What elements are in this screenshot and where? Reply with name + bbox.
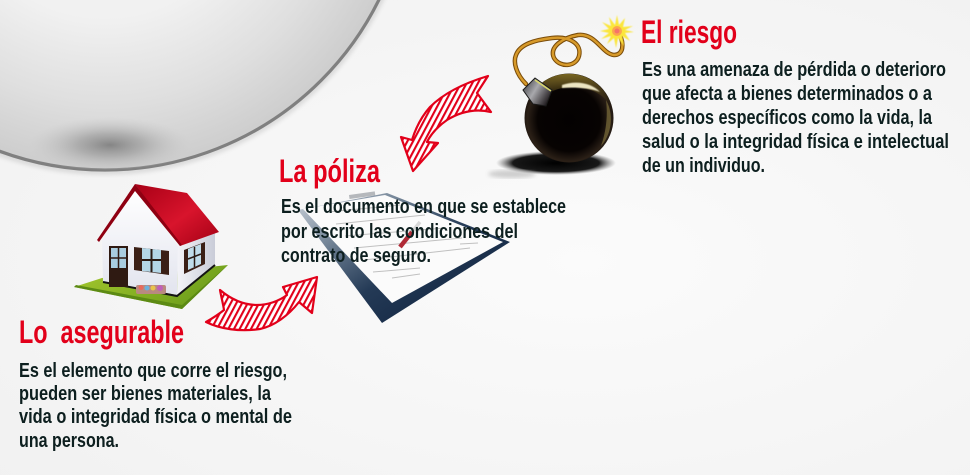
text block: La póliza description [281,196,566,267]
icon: spark [600,15,634,48]
text block: El riesgo description [642,59,949,177]
arrow: bomb to policy [401,76,491,171]
text block: Lo asegurable description: pueden ser bienes materiales, la [19,383,272,405]
text block: Lo asegurable description: una persona. [19,430,119,452]
text block: El riesgo description: de un individuo. [642,155,765,177]
text block: La póliza description: Es el documento en que se establece [281,196,566,218]
text block: Lo asegurable description: Es el elemento que corre el riesgo, [19,360,287,382]
text block: La póliza description: contrato de seguro. [281,245,431,267]
arrow: house to policy [206,277,317,330]
heading: Lo asegurable: Lo asegurable [19,314,184,350]
icon: house [74,184,228,309]
heading: La póliza: La póliza [279,153,380,189]
heading: El riesgo: El riesgo [641,14,737,50]
decorative grey disc [0,0,415,175]
text block: Lo asegurable description [19,360,292,452]
icon: clipboard with document [298,191,510,323]
text block: Lo asegurable description: vida o integridad física o mental de [19,406,292,428]
icon: bomb [488,33,622,178]
text block: La póliza description: por escrito las condiciones del [281,221,518,243]
